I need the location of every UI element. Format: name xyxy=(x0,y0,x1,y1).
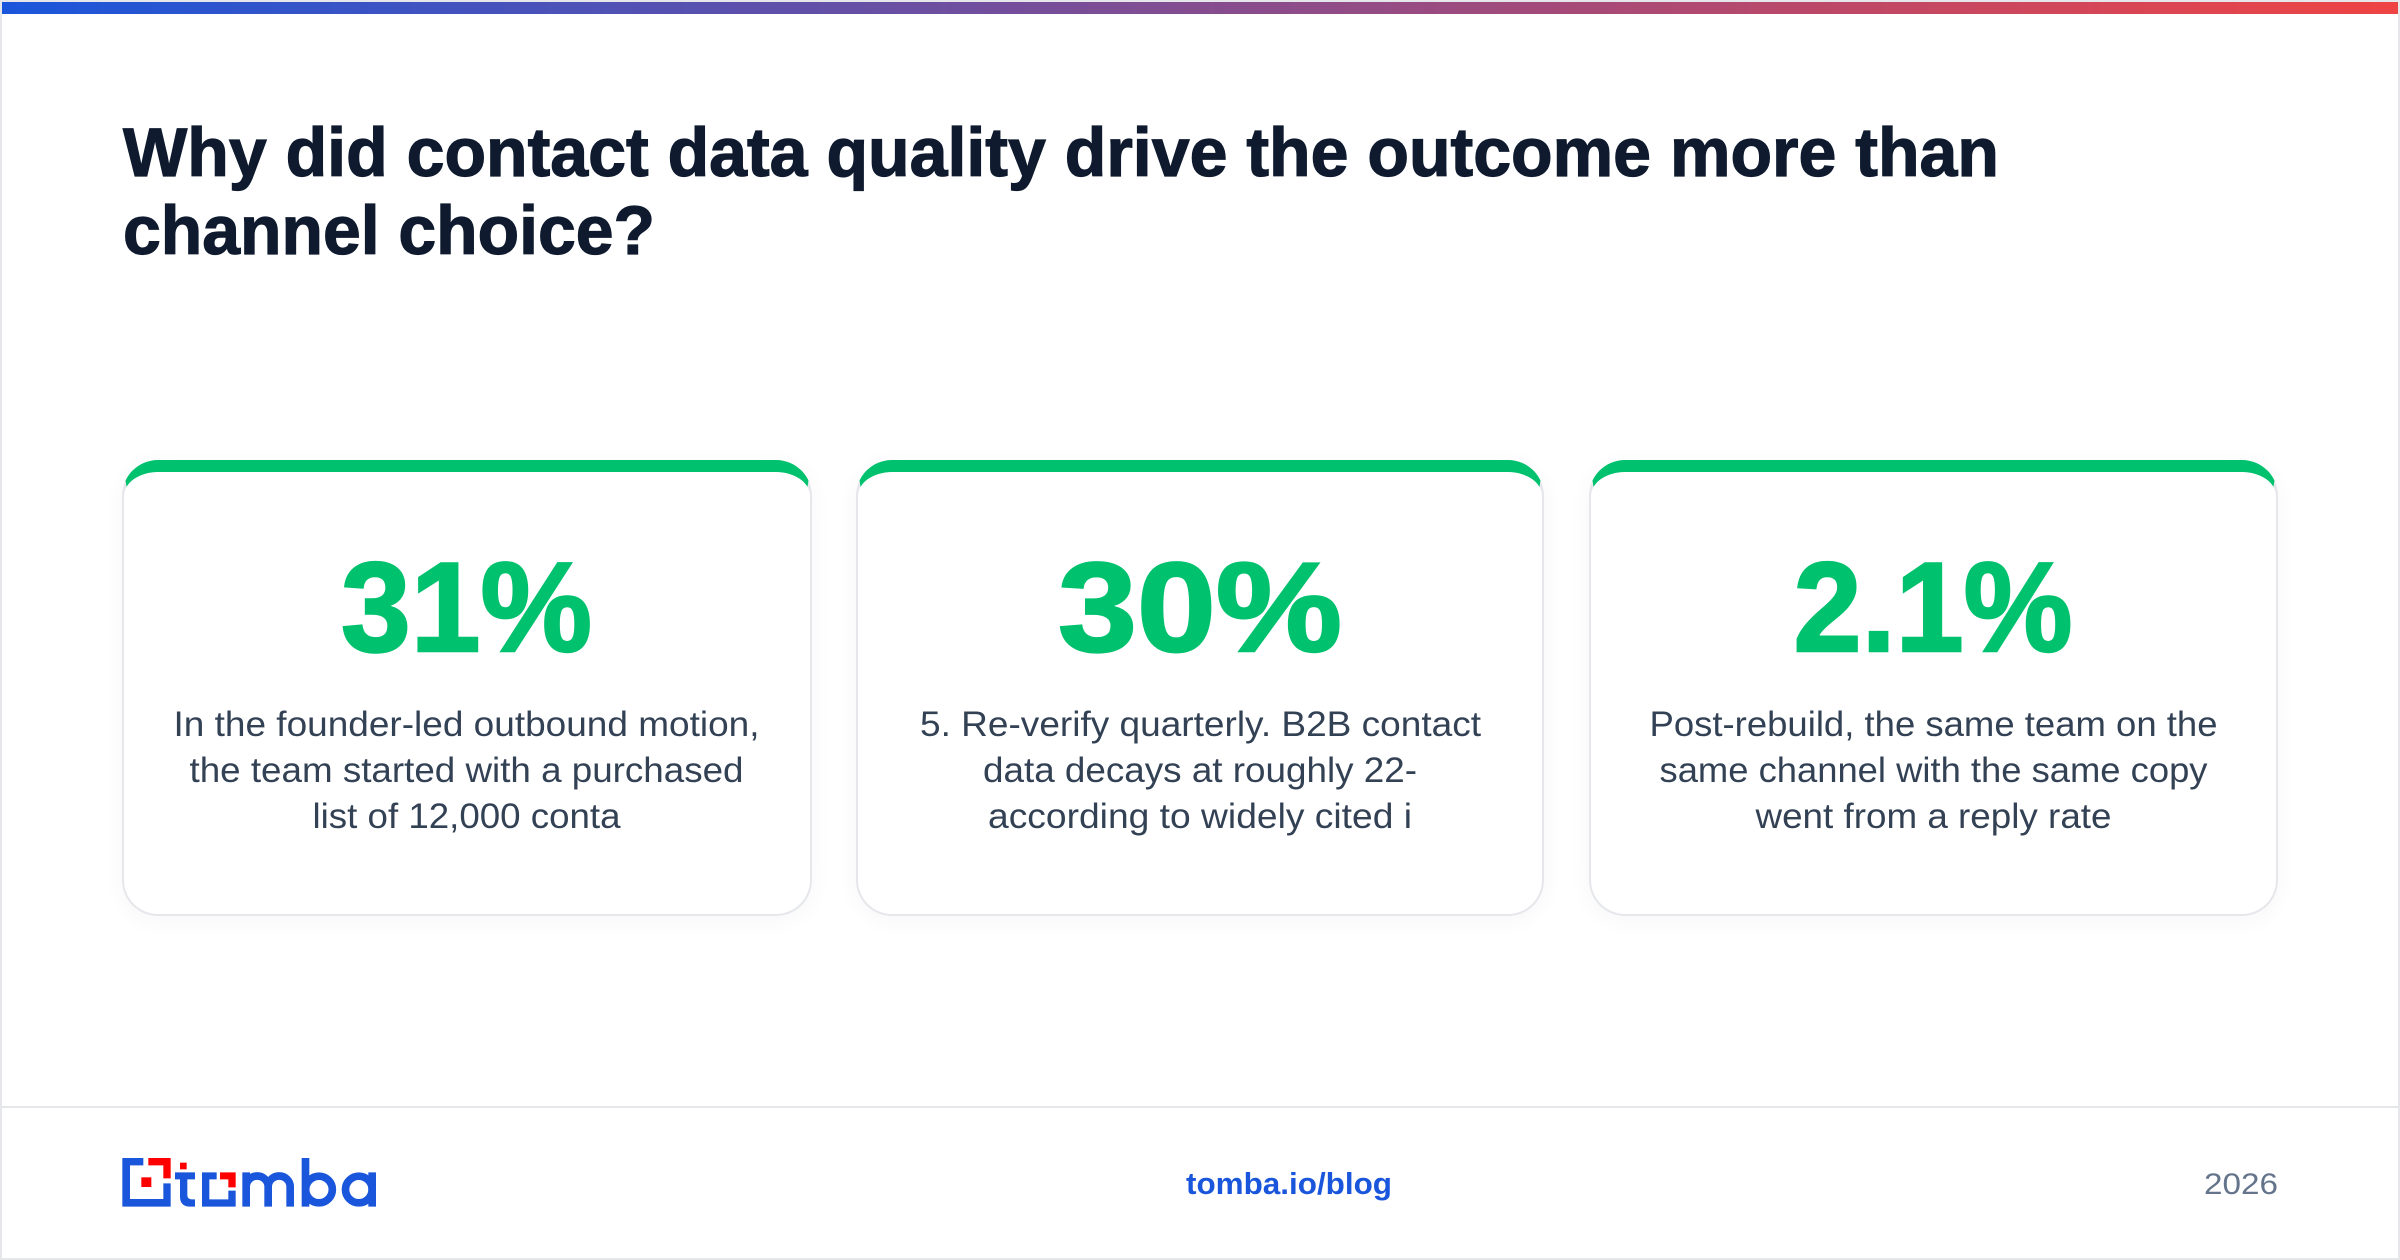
title: channel choice? xyxy=(123,192,655,269)
stat value: 2.1%: 2.1% xyxy=(1794,536,2072,678)
description text: list of 12,000 conta xyxy=(312,797,621,836)
description text: same channel with the same copy xyxy=(1660,751,2208,790)
logo wordmark xyxy=(175,1158,372,1207)
description text: went from a reply rate xyxy=(1754,797,2112,836)
footer link: tomba.io/blog xyxy=(1186,1166,1392,1201)
panel: stat card 31% xyxy=(122,460,812,916)
icon: tomba logo xyxy=(122,1158,376,1207)
description text xyxy=(1650,705,2218,836)
description text: Post-rebuild, the same team on the xyxy=(1650,705,2218,744)
top gradient bar xyxy=(2,2,2398,14)
panel: stat card 30% xyxy=(856,460,1544,916)
footer year: 2026 xyxy=(2204,1168,2278,1201)
description text: data decays at roughly 22- xyxy=(983,751,1417,790)
description text xyxy=(174,705,760,836)
description text: according to widely cited i xyxy=(988,797,1412,836)
description text xyxy=(920,705,1481,836)
description text: 5. Re-verify quarterly. B2B contact xyxy=(920,705,1481,744)
stat value: 30%: 30% xyxy=(1058,536,1342,678)
title xyxy=(122,114,1999,269)
panel: stat card 2.1% xyxy=(1589,460,2278,916)
logo mark xyxy=(122,1158,171,1207)
description text: the team started with a purchased xyxy=(190,751,744,790)
description text: In the founder-led outbound motion, xyxy=(174,705,760,744)
stat value: 31%: 31% xyxy=(341,536,592,678)
title: Why did contact data quality drive the outcome more than xyxy=(123,114,1999,191)
